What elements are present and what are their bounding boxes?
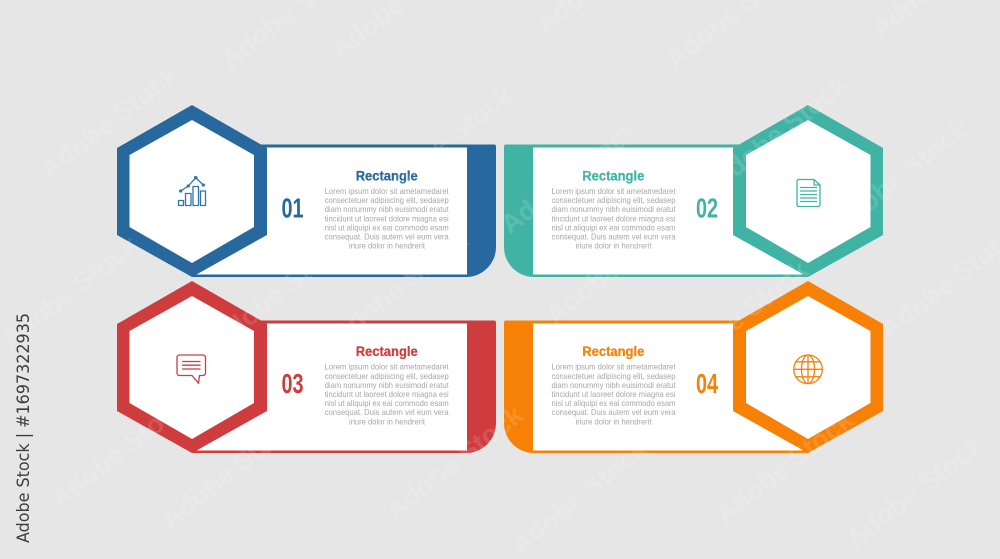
text block: body 2: tincidunt ut laoreet dolore miagna esi [552,213,676,223]
text block: body 4: diam nonummy nibh euisimodi eratut [552,380,676,390]
watermarks: Adobe Stock [705,69,855,195]
heading: Rectangle: Rectangle [356,168,418,184]
text card: blue [197,148,467,274]
number 03: 03 [282,368,304,399]
banner: red frame [192,320,496,453]
hexagon inner: blue [130,120,254,263]
text block: body 4: Lorem ipsum dolor sit ametamedaret [552,362,676,372]
panel 4: orange step 04 [504,281,883,453]
watermarks: Adobe Stock [505,434,655,559]
stock credit text: Adobe Stock | #1697322935 [14,313,34,543]
watermarks: Adobe Stock [325,224,475,350]
watermarks: Adobe Stock [205,229,355,355]
panel 1: blue step 01 [117,105,496,277]
text block: body 2: iriure dolor in hendrerit [576,241,652,251]
text block: body 3: tincidunt ut laoreet dolore miagna esi [325,389,449,399]
text block: body 3 [325,362,449,426]
text block: body 3: iriure dolor in hendrerit [349,416,426,426]
text block: body 4: nisl ut aliquipi ex eai commodo esam [552,398,676,408]
number 04: 04 [696,368,718,399]
panel 2: teal step 02 [504,105,883,277]
icon: speech bubble [177,355,206,383]
heading: Rectangle: Rectangle [582,344,645,359]
heading: Rectangle: Rectangle [356,344,418,359]
text block: body 1: iriure dolor in hendrerit [349,241,426,251]
text block: body 4 [552,362,676,426]
text block: body 1: nisl ut aliquipi ex eai commodo esam [325,222,449,232]
number 02: 02 [696,192,718,224]
hexagon: orange [733,281,883,453]
text card: orange [533,324,803,450]
heading: Rectangle: Rectangle [582,168,645,184]
text block: body 3: consectetuer adipiscing elit, sedasep [325,371,449,381]
banner: orange frame [504,320,808,453]
text block: body 3: Lorem ipsum dolor sit ametamedaret [325,362,449,372]
panel 3: red step 03 [117,281,496,453]
watermarks: Adobe Stock [665,254,815,380]
text block: body 1: consequat. Duis autem vel eum vera [325,232,449,242]
banner: teal frame [504,144,808,277]
text block: body 3: diam nonummy nibh euisimodi eratut [325,380,449,390]
hexagon inner: orange [746,296,870,439]
text block: body 1: diam nonummy nibh euisimodi eratut [325,204,449,214]
text block: body 2: Lorem ipsum dolor sit ametamedaret [552,186,676,196]
watermarks: Adobe Stock [495,114,645,240]
watermarks: Adobe Stock [540,204,690,330]
text block: body 4: tincidunt ut laoreet dolore miagna esi [552,389,676,399]
hexagon inner: red [130,296,254,439]
watermarks: Adobe Stock [840,429,990,555]
text block: body 4: consectetuer adipiscing elit, sedasep [552,371,676,381]
text block: body 1: consectetuer adipiscing elit, sedasep [325,195,449,205]
hexagon inner: teal [746,120,870,263]
watermarks: Adobe Stock [710,404,860,530]
text block: body 2: nisl ut aliquipi ex eai commodo esam [552,222,676,232]
text block: body 1: tincidunt ut laoreet dolore miagna esi [325,213,449,223]
watermarks: Adobe Stock [45,389,195,515]
text block: body 3: nisl ut aliquipi ex eai commodo esam [325,398,449,408]
number 01: 01 [282,192,304,224]
hexagon: teal [733,105,883,277]
icon: document [797,180,820,206]
watermarks: Adobe Stock [35,59,185,185]
text card: red [197,324,467,450]
text block: body 3: consequat. Duis autem vel eum vera [325,407,449,417]
hexagon: red [117,281,267,453]
text block: body 1 [325,186,449,251]
icon: bar chart [178,176,206,206]
text block: body 2: consequat. Duis autem vel eum vera [552,232,676,242]
text card: teal [533,148,803,274]
text block: body 1: Lorem ipsum dolor sit ametamedaret [325,186,449,196]
watermarks: Adobe Stock [825,114,975,240]
text block: body 4: iriure dolor in hendrerit [576,416,652,426]
text block: body 2 [552,186,676,251]
text block: body 2: consectetuer adipiscing elit, sedasep [552,195,676,205]
icon: globe [794,355,822,384]
watermarks: Adobe Stock [380,399,530,525]
text block: body 2: diam nonummy nibh euisimodi eratut [552,204,676,214]
banner: blue frame [192,144,496,277]
text block: body 4: consequat. Duis autem vel eum vera [552,407,676,417]
watermarks: Adobe Stock [370,79,520,205]
watermarks: Adobe Stock [155,409,305,535]
hexagon: blue [117,105,267,277]
